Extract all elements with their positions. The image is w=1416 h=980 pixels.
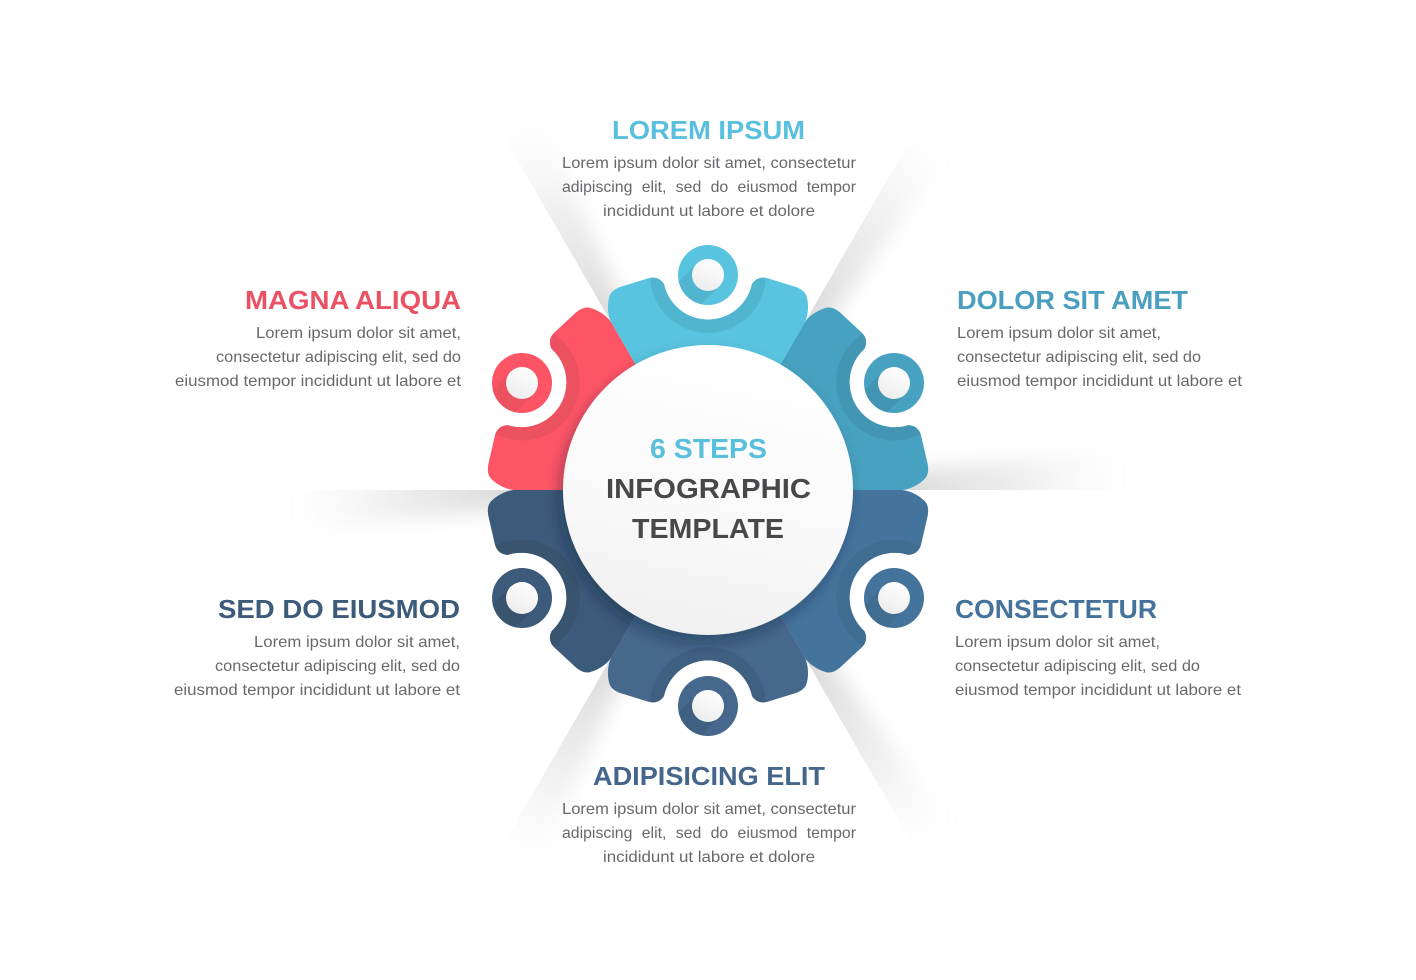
text block: lorem ipsum: incididunt ut labore et dolore — [603, 203, 815, 220]
segment: upper right — [780, 308, 928, 490]
gear ring of six segments — [488, 278, 928, 702]
beam: lower right — [806, 659, 902, 795]
text block: dolor sit amet: Lorem ipsum dolor sit amet, — [957, 325, 1161, 342]
text block: lorem ipsum — [562, 115, 857, 220]
text block: dolor sit amet: eiusmod tempor incididunt ut labore et — [957, 373, 1243, 390]
text block: dolor sit amet: consectetur adipiscing elit, sed do — [957, 349, 1201, 366]
text block: dolor sit amet — [957, 285, 1243, 390]
text block: sed do eiusmod: consectetur adipiscing elit, sed do — [215, 658, 460, 675]
text block: adipisicing elit: ADIPISICING ELIT — [593, 761, 825, 791]
text block: adipisicing elit — [562, 761, 857, 866]
text block: adipisicing elit: incididunt ut labore et dolore — [603, 849, 815, 866]
center title: INFOGRAPHIC — [606, 473, 811, 504]
text block: consectetur — [955, 594, 1242, 699]
text block: consectetur: CONSECTETUR — [955, 594, 1157, 624]
text block: dolor sit amet: DOLOR SIT AMET — [957, 285, 1188, 315]
center title — [606, 433, 811, 544]
beam: upper right — [806, 185, 902, 321]
ring: top — [678, 245, 738, 305]
ring: lower left — [492, 568, 552, 628]
segment: bottom — [608, 616, 808, 702]
center title: TEMPLATE — [632, 513, 784, 544]
text block: sed do eiusmod: Lorem ipsum dolor sit amet, — [254, 634, 460, 651]
text block: sed do eiusmod: eiusmod tempor incididunt ut labore et — [174, 682, 461, 699]
beam: right — [904, 459, 1060, 490]
text block: magna aliqua: Lorem ipsum dolor sit amet, — [256, 325, 461, 342]
text block: lorem ipsum: LOREM IPSUM — [612, 115, 805, 145]
ring: lower right — [864, 568, 924, 628]
segment: lower right — [780, 490, 928, 672]
text block: magna aliqua: consectetur adipiscing elit, sed do — [216, 349, 461, 366]
text block: sed do eiusmod: SED DO EIUSMOD — [218, 594, 460, 624]
text block: sed do eiusmod — [174, 594, 461, 699]
text block: lorem ipsum: Lorem ipsum dolor sit amet, consectetur — [562, 155, 857, 172]
ring: upper right — [864, 353, 924, 413]
center disc — [563, 345, 853, 635]
beam: left — [356, 490, 512, 521]
segment: top — [608, 278, 808, 364]
text block: adipisicing elit: adipiscing elit, sed do eiusmod tempor — [562, 825, 857, 842]
text block: magna aliqua: MAGNA ALIQUA — [245, 285, 461, 315]
text block: magna aliqua: eiusmod tempor incididunt ut labore et — [175, 373, 462, 390]
beam: upper left — [532, 176, 622, 321]
text block: consectetur: Lorem ipsum dolor sit amet, — [955, 634, 1160, 651]
segment: upper left — [488, 308, 636, 490]
ring: upper left — [492, 353, 552, 413]
text block: adipisicing elit: Lorem ipsum dolor sit amet, consectetur — [562, 801, 857, 818]
text block: lorem ipsum: adipiscing elit, sed do eiusmod tempor — [562, 179, 857, 196]
ring: bottom — [678, 676, 738, 736]
rings — [492, 245, 924, 736]
text block: magna aliqua — [175, 285, 462, 390]
segment: lower left — [488, 490, 636, 672]
shadow beams — [356, 176, 1060, 804]
beam: lower left — [532, 658, 622, 804]
center title: 6 STEPS — [650, 433, 767, 464]
text block: consectetur: consectetur adipiscing elit, sed do — [955, 658, 1200, 675]
text block: consectetur: eiusmod tempor incididunt ut labore et — [955, 682, 1242, 699]
